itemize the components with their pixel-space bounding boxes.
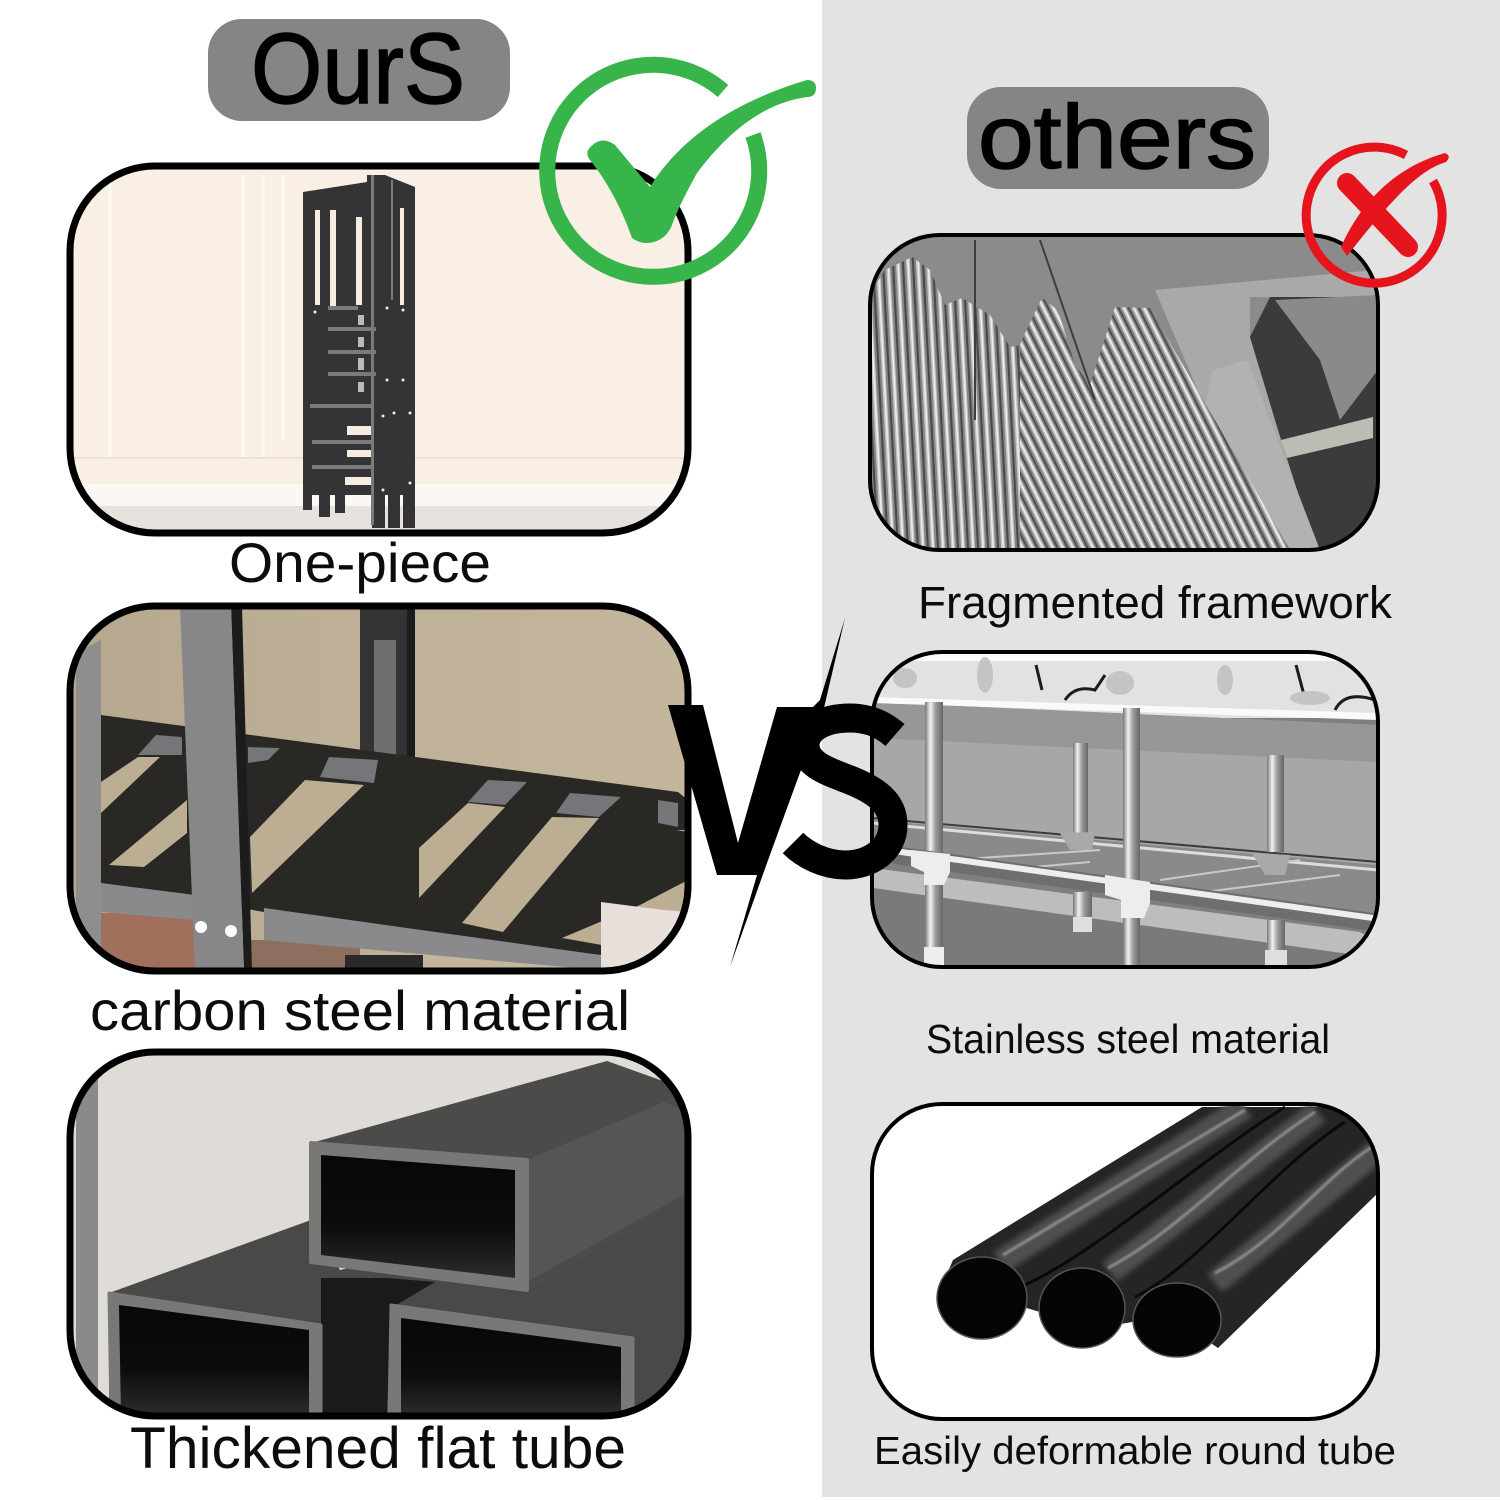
caption: carbon steel material: carbon steel material (90, 979, 630, 1042)
caption: Stainless steel material: Stainless steel material (926, 1016, 1330, 1062)
caption: Easily deformable round tube: Easily deformable round tube (874, 1430, 1396, 1473)
right column background (822, 0, 1500, 1497)
caption: One-piece: One-piece (229, 531, 491, 594)
panel: fragmented poles (870, 235, 1378, 550)
caption: Thickened flat tube: Thickened flat tube (130, 1416, 626, 1481)
icon: red cross (1306, 147, 1449, 283)
panel: thickened flat tube (70, 1052, 688, 1416)
caption: Fragmented framework: Fragmented framework (918, 577, 1392, 628)
icon: green check (547, 65, 816, 277)
panel: carbon steel shelf (70, 606, 688, 971)
panel: folded one-piece rack (70, 166, 688, 533)
heading: others: others (978, 88, 1256, 188)
panel: stainless steel rack (872, 652, 1378, 967)
VS emblem (668, 618, 895, 967)
heading: OurS: OurS (251, 13, 465, 125)
panel: round tubes (872, 1104, 1378, 1419)
